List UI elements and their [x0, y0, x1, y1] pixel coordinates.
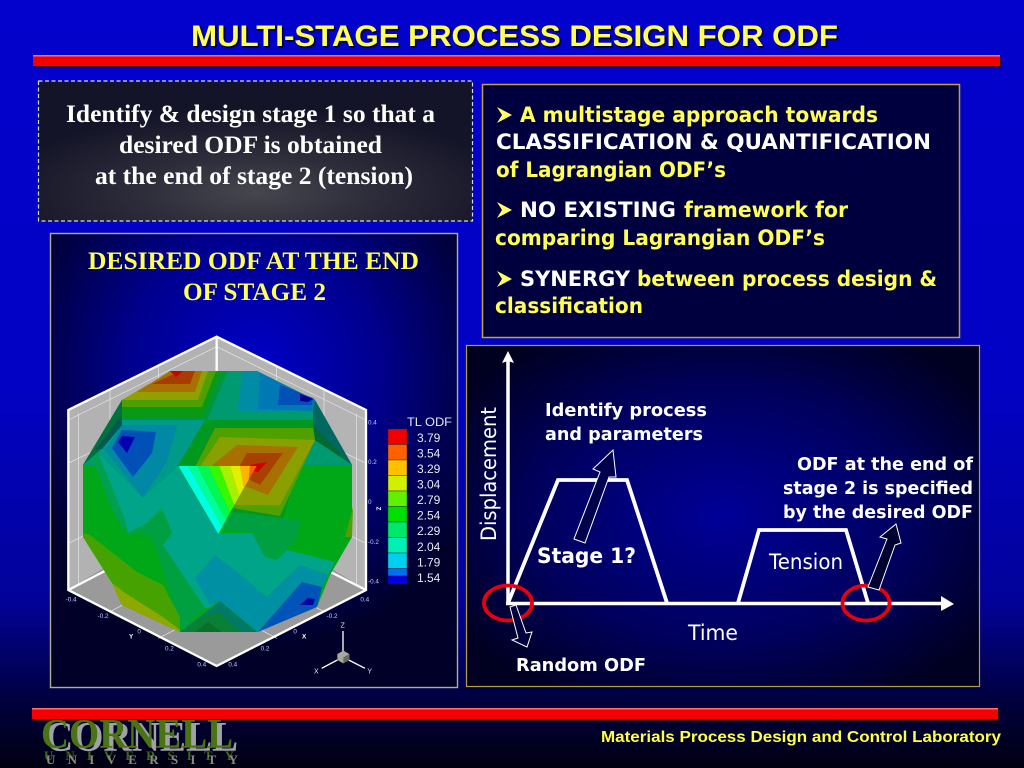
displacement label: Displacement — [477, 407, 501, 541]
central peak bands — [178, 420, 315, 518]
bullet 2 — [495, 198, 849, 250]
legend labels: 2.04 — [417, 540, 441, 554]
bullet 1: of Lagrangian ODF’s — [496, 158, 726, 182]
lab name: Materials Process Design and Control Laboratory — [601, 729, 1001, 746]
bullet 3: SYNERGY — [520, 267, 631, 291]
legend labels: 1.79 — [417, 556, 441, 570]
panel heading — [88, 248, 419, 306]
axis tick labels: -0.4 — [66, 596, 77, 603]
Cornell University logo: UNIVERSITY — [44, 748, 235, 763]
axis tick labels — [66, 419, 382, 669]
legend bands — [388, 429, 407, 584]
tension curve — [738, 530, 868, 603]
left green notch band — [125, 508, 205, 630]
central triangle bands — [178, 466, 257, 534]
axis tick labels: 0.4 — [368, 419, 377, 426]
axis tick labels: -0.2 — [98, 613, 109, 620]
Cornell University logo: CORNELL — [45, 715, 238, 761]
time label: Time — [687, 621, 738, 645]
axis tick labels: 0 — [368, 499, 372, 506]
axis tick labels: Y — [129, 633, 134, 640]
title: MULTI-STAGE PROCESS DESIGN FOR ODF — [191, 20, 838, 53]
panel: displacement time chart — [466, 346, 980, 686]
axes — [502, 351, 954, 611]
legend labels: 2.29 — [417, 524, 441, 538]
goal text: at the end of stage 2 (tension) — [95, 163, 413, 190]
identify label — [545, 400, 707, 445]
axis triad: X — [314, 668, 319, 675]
axis tick labels: 0.4 — [197, 662, 207, 669]
panel heading: OF STAGE 2 — [183, 279, 326, 306]
left green strip — [93, 453, 125, 533]
legend labels: 2.54 — [417, 508, 441, 522]
right side facet — [313, 398, 352, 465]
bullet 3: between process design & — [637, 267, 937, 291]
top peak bands — [122, 371, 228, 425]
desired ODF label — [783, 454, 973, 523]
axis tick labels: -0.2 — [368, 539, 379, 546]
ODF surface — [83, 371, 353, 632]
bullet 1: A multistage approach towards — [520, 103, 878, 127]
red circle: start — [484, 586, 532, 620]
stage 1 label: Stage 1? — [537, 544, 636, 568]
desired ODF label: by the desired ODF — [783, 502, 973, 523]
bullet list — [495, 103, 937, 318]
right green notch band — [222, 512, 300, 560]
axis tick labels: 0.2 — [368, 459, 377, 466]
axis tick labels: 0 — [137, 629, 141, 636]
axis tick labels: -0.2 — [327, 613, 338, 620]
top red bar — [33, 55, 1001, 68]
right edge sliver — [345, 507, 353, 537]
Cornell University logo: UNIVERSITY — [46, 752, 239, 767]
axis tick labels: 0.2 — [261, 645, 270, 652]
identify label: and parameters — [545, 424, 703, 445]
axis triad — [314, 622, 372, 675]
panel: design goal — [38, 81, 472, 221]
random ODF label: Random ODF — [516, 655, 646, 676]
upper left chevrons — [98, 420, 205, 498]
bullet 3: classification — [495, 294, 643, 318]
legend labels: 1.54 — [417, 571, 441, 585]
red circle: end — [842, 586, 890, 620]
axis triad: Z — [341, 622, 346, 629]
lower blue teal — [195, 555, 328, 632]
axis triad: Y — [367, 668, 372, 675]
bullet 2: NO EXISTING — [520, 198, 676, 222]
goal text: Identify & design stage 1 so that a — [66, 101, 435, 128]
axis tick labels: 0.2 — [165, 645, 174, 652]
legend labels: 3.54 — [417, 446, 441, 460]
legend labels: 2.79 — [417, 493, 441, 507]
desired ODF label: stage 2 is specified — [783, 478, 973, 499]
stage 1 curve — [508, 480, 667, 603]
panel heading: DESIRED ODF AT THE END — [88, 248, 419, 275]
arrow: stage 1 to identify process — [574, 450, 616, 543]
bottom dark bands — [180, 601, 257, 632]
legend labels — [407, 415, 452, 585]
tension label: Tension — [768, 550, 843, 574]
legend labels: 3.04 — [417, 478, 441, 492]
central teal region — [98, 453, 335, 608]
goal text — [66, 101, 435, 190]
legend labels: 3.79 — [417, 431, 441, 445]
bullet 1 — [496, 103, 931, 182]
bullet 2: comparing Lagrangian ODF’s — [495, 226, 825, 250]
bottom red bar — [32, 708, 1000, 721]
arrow: random ODF — [510, 605, 532, 647]
axis tick labels: 0.4 — [228, 662, 238, 669]
arrow: end of stage 2 — [868, 524, 901, 590]
panel: desired ODF — [50, 234, 458, 688]
plot walls — [68, 337, 366, 666]
colour legend — [388, 415, 452, 585]
bullet 3 — [495, 267, 937, 318]
bullet 2: framework for — [684, 198, 849, 222]
axis tick labels: 0 — [293, 629, 297, 636]
chart labels — [477, 400, 973, 676]
lower left olive — [83, 533, 180, 632]
goal text: desired ODF is obtained — [119, 132, 382, 159]
axis tick labels: Z — [375, 507, 382, 511]
desired ODF label: ODF at the end of — [797, 454, 973, 475]
panel: key points — [482, 84, 960, 338]
axis tick labels: 0.4 — [360, 596, 370, 603]
legend labels: TL ODF — [407, 415, 452, 429]
bullet 1: CLASSIFICATION & QUANTIFICATION — [496, 130, 931, 154]
legend labels: 3.29 — [417, 462, 441, 476]
Cornell University logo: CORNELL — [41, 712, 233, 758]
identify label: Identify process — [545, 400, 707, 421]
axis tick labels: -0.4 — [368, 578, 379, 585]
left side facet — [83, 400, 122, 465]
upper middle blue bands — [237, 371, 315, 411]
axis tick labels: X — [302, 633, 307, 640]
ODF contour plot — [66, 337, 382, 675]
